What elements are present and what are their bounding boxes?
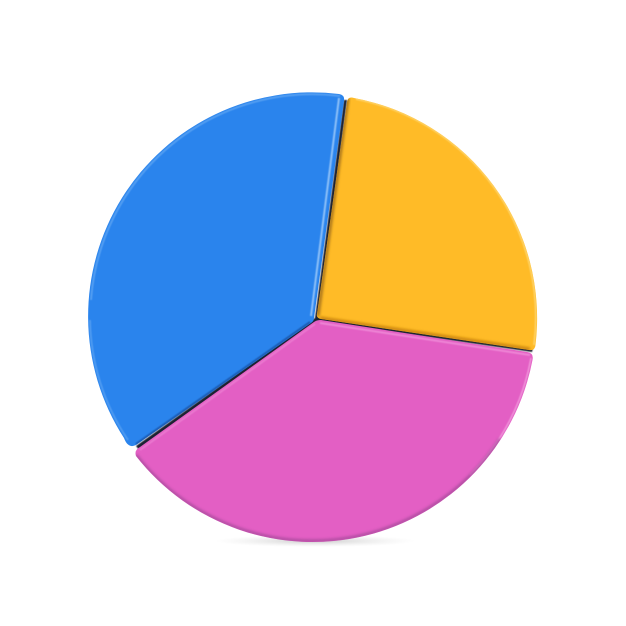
dark gap behind the wedges [136, 100, 533, 450]
wedge: yellow [317, 98, 537, 350]
ground shadow [215, 535, 415, 547]
pie chart [88, 92, 537, 542]
wedge: blue [88, 92, 344, 446]
wedge: pink [136, 320, 533, 542]
